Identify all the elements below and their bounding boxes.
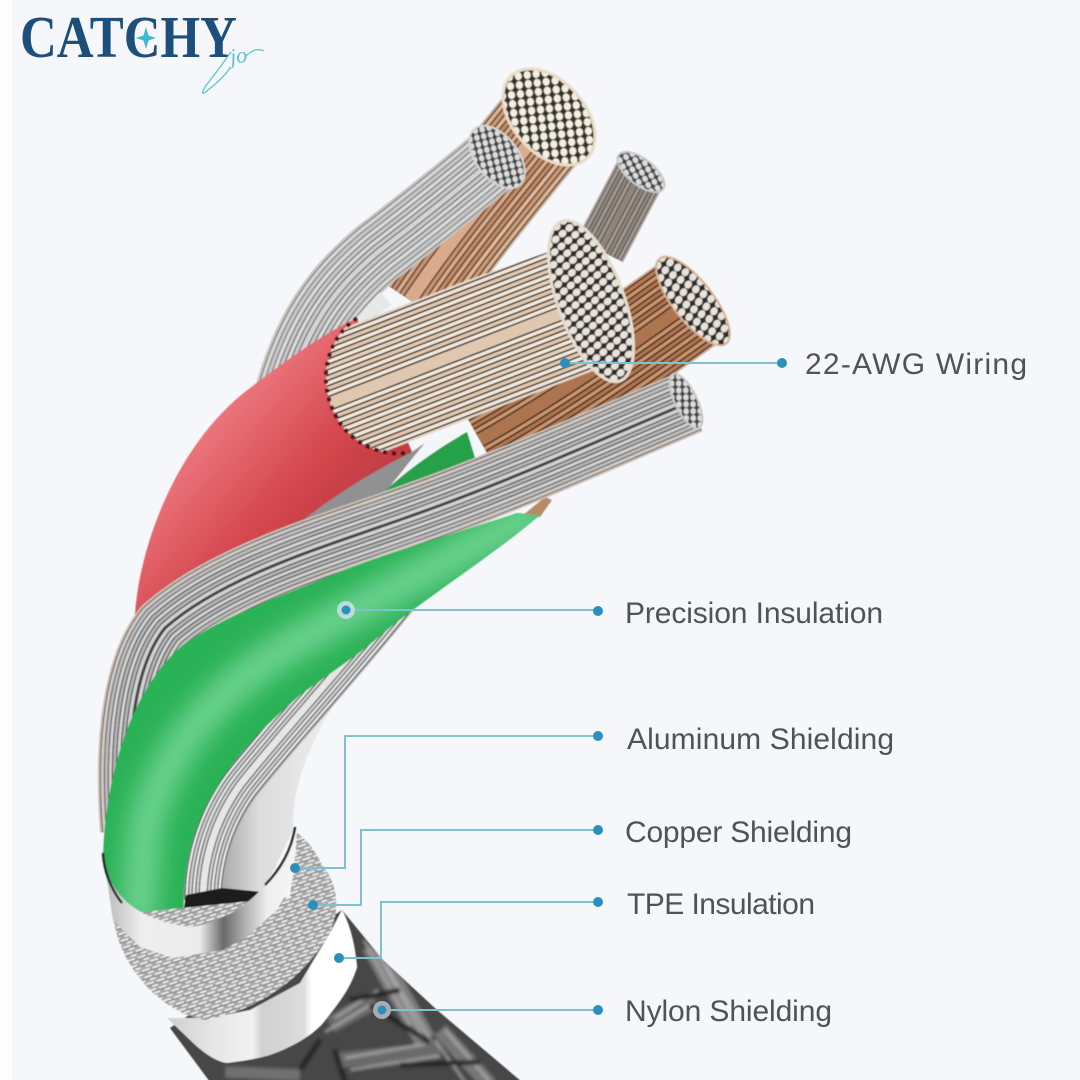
wire: front green insulation: [102, 512, 540, 913]
wire: rear green insulation: [378, 432, 475, 498]
logo: CATCHY jo: [20, 4, 264, 93]
copper mesh shielding: [113, 833, 336, 1020]
wire: right copper strand bundle: [480, 300, 693, 440]
sliver: white core behind red wire: [352, 292, 392, 322]
sliver: white gap by grey core: [382, 432, 460, 496]
wire: red insulation: [135, 318, 412, 626]
label: TPE Insulation: [334, 888, 815, 963]
ring inner rim: [103, 827, 295, 903]
wire end: top copper cross-section: [485, 51, 613, 183]
cable illustration: [95, 51, 742, 1080]
label: Aluminum Shielding: Aluminum Shielding: [627, 723, 894, 756]
wire end: silver cross-section: [458, 116, 536, 198]
label: TPE Insulation: TPE Insulation: [627, 888, 815, 921]
shadow inside ring: [181, 888, 262, 930]
label: 22-AWG Wiring: [560, 348, 1027, 381]
nylon braided jacket: [160, 905, 530, 1080]
red rim scallops: [326, 318, 410, 453]
wire stub: copper tip below grey strand: [522, 497, 552, 517]
wire: red sliver between strands and green: [150, 630, 215, 700]
wire: top copper strand bundle: [410, 118, 550, 300]
label: Aluminum Shielding: [290, 723, 894, 873]
wire: front silver strand bundle: [130, 402, 690, 830]
wire: lower silver strand bundle: [203, 595, 400, 900]
label: 22-AWG Wiring: 22-AWG Wiring: [805, 348, 1027, 381]
wire end: main tan cross-section: [531, 210, 651, 392]
wire end: front silver cross-section: [663, 369, 709, 433]
label: Copper Shielding: [308, 816, 852, 910]
wire: inner white core: [215, 695, 340, 895]
sliver: grey core under red wire: [282, 443, 425, 537]
wire end: right copper cross-section: [644, 246, 742, 356]
wire end: small cross-section: [611, 145, 671, 199]
silver aluminum ring: [103, 827, 296, 958]
label: Precision Insulation: Precision Insulation: [625, 597, 883, 630]
label: Copper Shielding: Copper Shielding: [625, 816, 852, 849]
label: Nylon Shielding: [373, 995, 832, 1028]
logo: CATCHY jo: CATCHY: [20, 4, 237, 70]
label: Precision Insulation: [337, 597, 883, 630]
logo: CATCHY jo: jo: [225, 42, 249, 69]
label: Nylon Shielding: Nylon Shielding: [625, 995, 832, 1028]
TPE white band: [167, 910, 357, 1063]
wire: main tan strand bundle: [325, 300, 596, 405]
wire: top-left silver strand bundle: [288, 156, 498, 392]
wire: small grey-brown strand bundle: [600, 172, 641, 250]
